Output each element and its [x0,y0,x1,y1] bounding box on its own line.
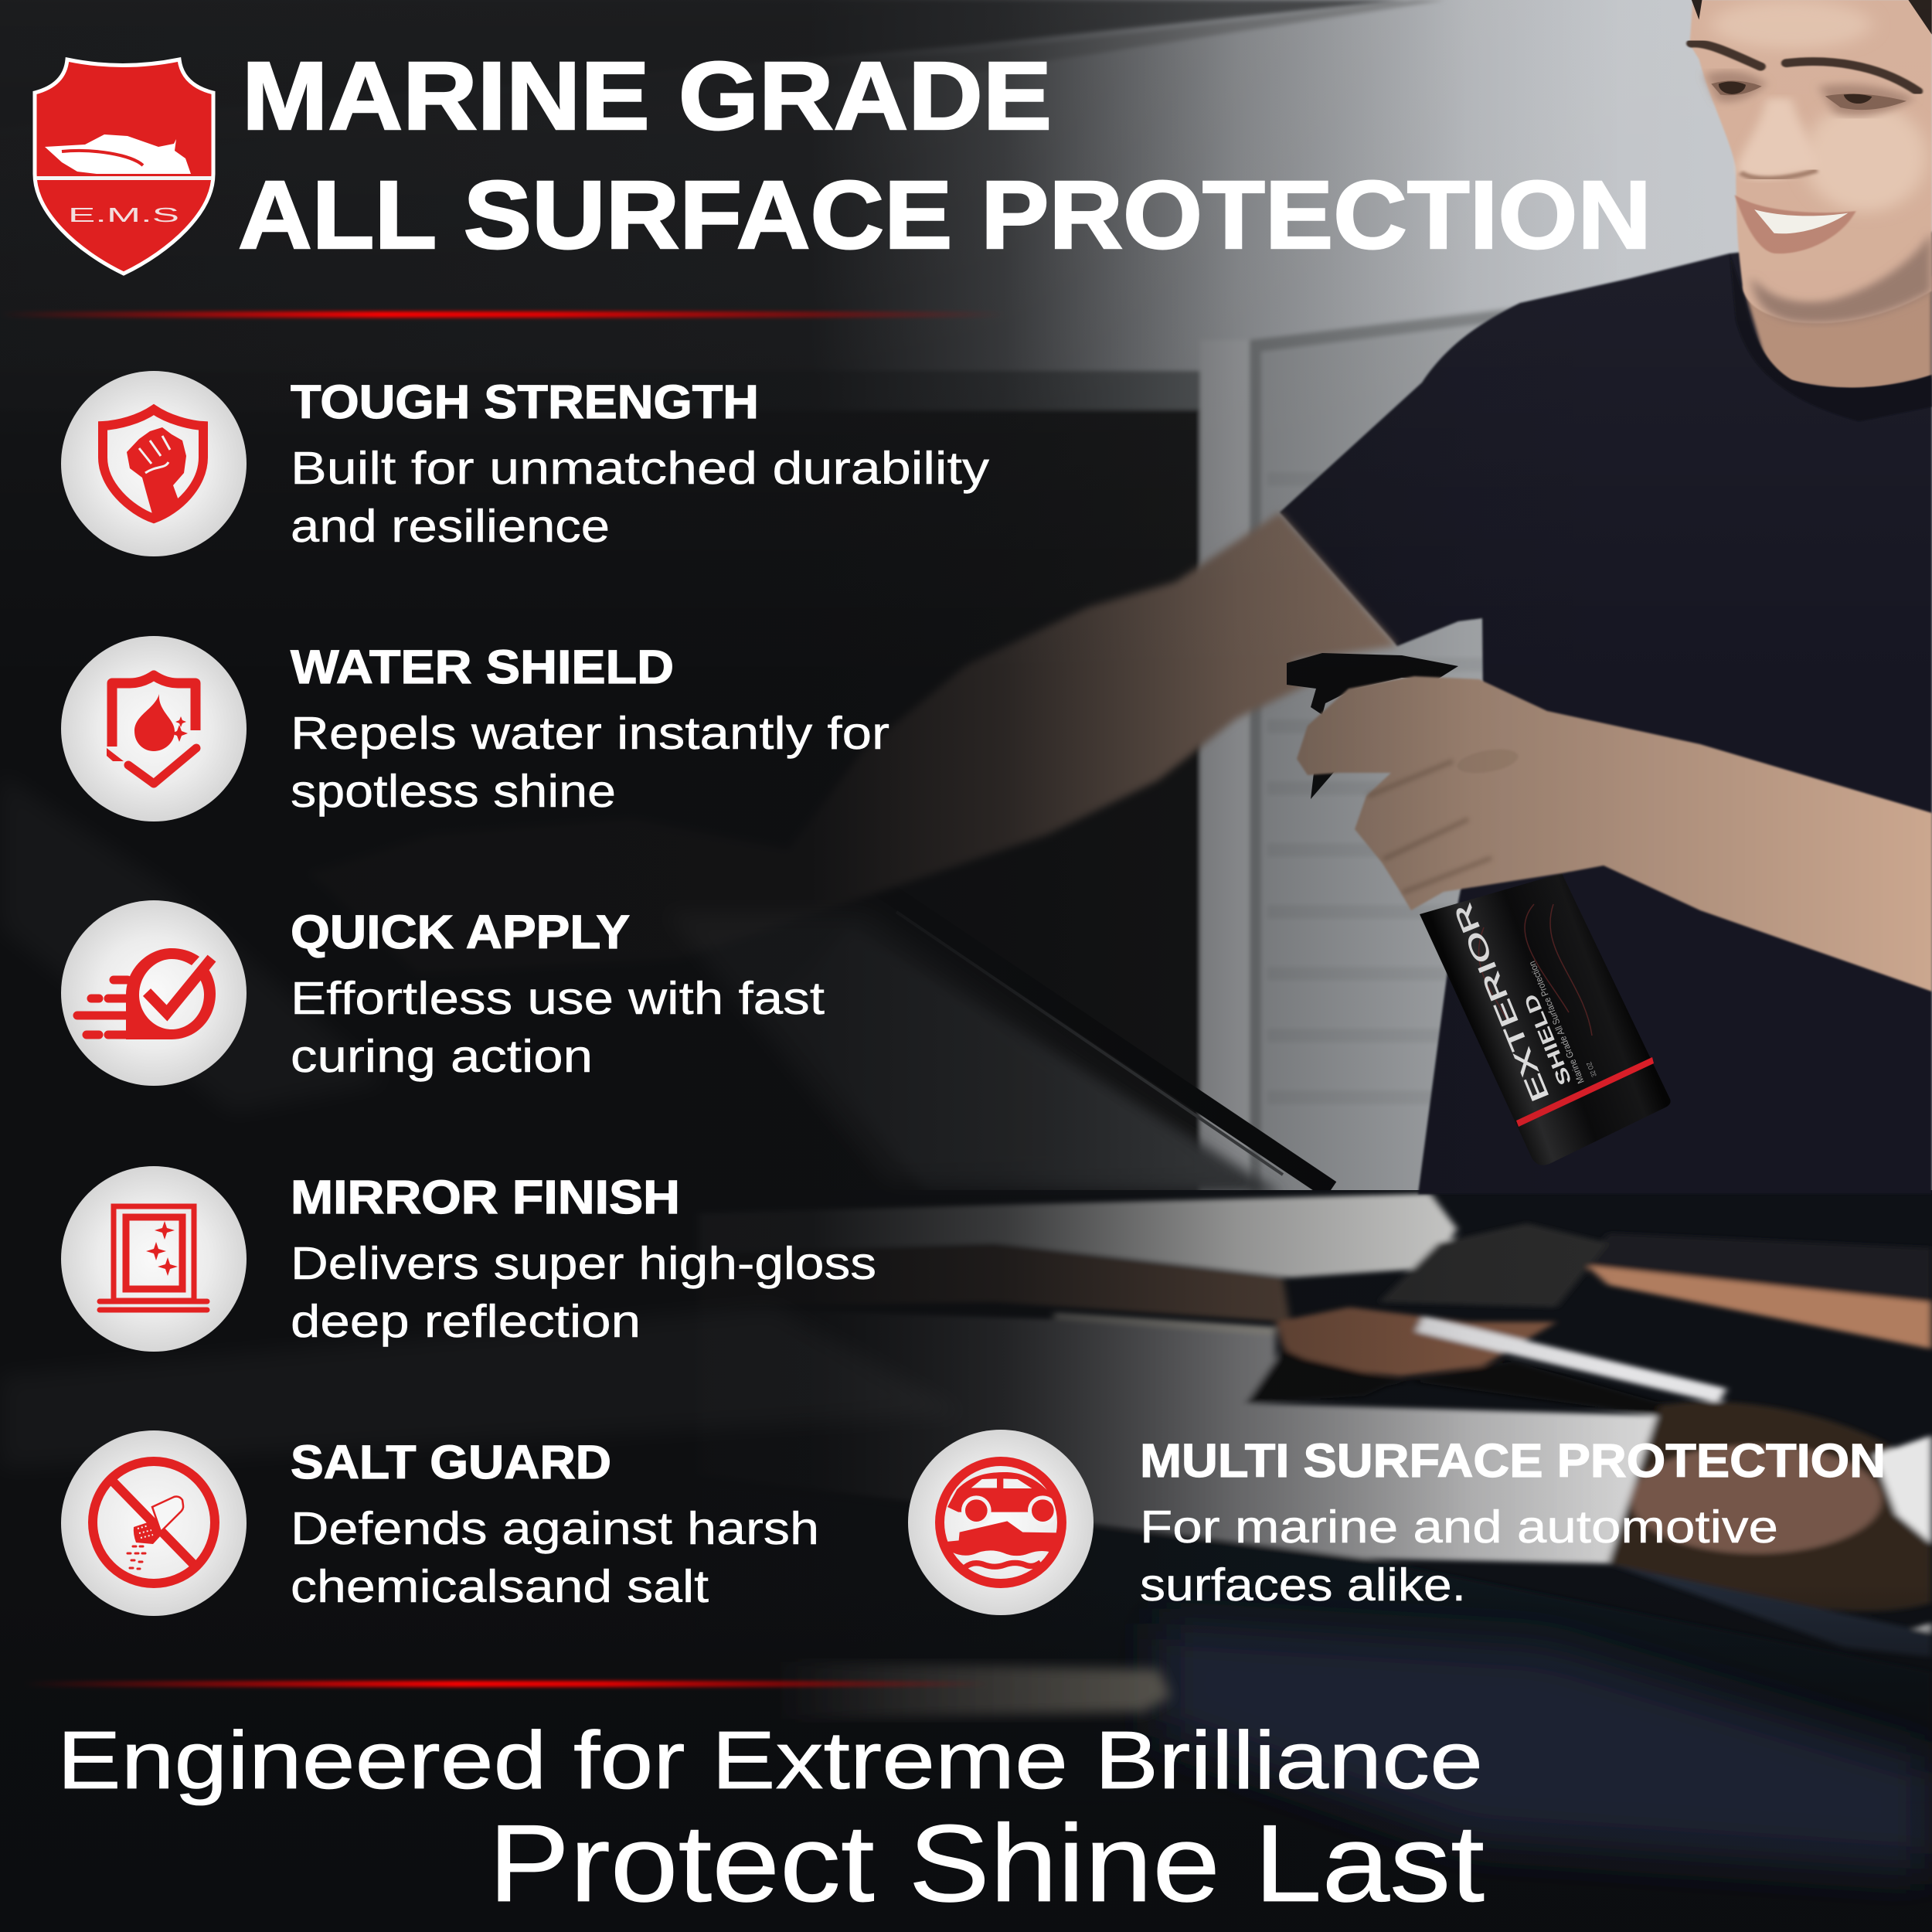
boat [45,134,191,174]
bottle red band [1516,1057,1654,1127]
description [291,973,825,1082]
car body [947,1472,1061,1512]
logo: E.M.S shield [35,60,213,274]
description: Repels water instantly for [291,708,889,759]
heading: WATER SHIELD [291,641,674,693]
man: hand and forearm [1297,676,1932,992]
wall [0,0,1932,1236]
head [1689,0,1932,323]
description: spotless shine [291,766,616,817]
boat hull [946,1521,1057,1556]
logo rule [36,176,212,180]
description: curing action [291,1031,593,1082]
description: chemicalsand salt [291,1561,709,1612]
eyebrows [1692,43,1917,91]
eye socket shade [1705,70,1914,116]
irises [1719,82,1872,104]
footer slogan [57,1715,1485,1925]
feature: tough strength [61,371,990,556]
feature: quick apply [61,900,825,1086]
car windows [971,1478,1032,1488]
roof eave [0,0,1445,170]
bottle label: volume: 32 OZ [1585,1060,1598,1078]
title line 1: MARINE GRADE [242,43,1052,150]
bottle label: tagline: Marine Grade All Surface Protection [1526,960,1587,1085]
bottle contours [1478,904,1592,1036]
nose shadow [1741,170,1817,179]
heading: MIRROR FINISH [291,1171,680,1223]
boat details [62,151,143,165]
description: deep reflection [291,1296,641,1347]
bottom red divider [23,1681,989,1687]
feature: multi surface protection [908,1430,1886,1615]
description: Delivers super high-gloss [291,1238,876,1289]
icon: window with sparkles [61,1166,247,1352]
faint windshield highlights [0,773,1252,1468]
feature: salt guard [61,1430,819,1616]
icon: shield with water drop [61,636,247,821]
description [291,443,990,552]
title line 2: ALL SURFACE PROTECTION [238,162,1651,269]
collar [1730,254,1932,421]
eyes [1711,80,1906,110]
forehead light [1711,0,1872,49]
icon: no salt [61,1430,247,1616]
description: Defends against harsh [291,1503,819,1554]
teeth [1754,209,1848,233]
logo text: E.M.S [68,203,179,226]
car hood with reflections [0,1190,1932,1932]
heading: MULTI SURFACE PROTECTION [1140,1434,1886,1487]
top red divider [0,311,1005,318]
heading: SALT GUARD [291,1436,611,1488]
title [238,43,1651,269]
bottle neck [1391,736,1426,770]
icon: car and boat [908,1430,1094,1615]
man: spray bottle [1287,653,1671,1165]
bottle label: SHIELD: SHIELD [1520,991,1577,1088]
description: Effortless use with fast [291,973,825,1024]
slogan line 1: Engineered for Extreme Brilliance [57,1715,1483,1806]
feature: water shield [61,636,889,821]
description: and resilience [291,501,610,552]
bottom dark overlay [0,1584,1932,1932]
feature: mirror finish [61,1166,876,1352]
description: surfaces alike. [1140,1560,1466,1611]
stubble [1751,232,1932,323]
pale hood patch [773,1662,1171,1719]
window and shutter [0,305,1526,1221]
trigger [1311,761,1340,799]
man: face [1689,0,1932,421]
description: Built for unmatched durability [291,443,990,494]
bottle body [1420,873,1671,1165]
blue hood sheen [1159,1623,1932,1870]
man: reaching arm [309,512,1397,974]
windshield and A-pillar [773,867,1331,1194]
slogan line 2: Protect Shine Last [488,1802,1485,1925]
nose [1737,99,1819,179]
cheek light [1804,104,1927,212]
description [291,708,889,817]
icon: shield with fist [61,371,247,556]
description: For marine and automotive [1140,1502,1778,1553]
top glow [0,0,1932,696]
description [1140,1502,1778,1611]
description [291,1503,819,1612]
bottle label: EXTERIOR: EXTERIOR [1448,900,1554,1106]
bottle trigger head [1287,653,1458,715]
heading: QUICK APPLY [291,906,630,958]
ring [940,1461,1062,1583]
wave line [964,1563,1041,1567]
neck [1743,276,1932,392]
man: t-shirt [1280,232,1932,1194]
description [291,1238,876,1347]
shield body [35,60,213,274]
heading: TOUGH STRENGTH [291,376,759,428]
mouth [1735,195,1856,253]
hair [1692,0,1932,35]
icon: fast check mark [61,900,247,1086]
